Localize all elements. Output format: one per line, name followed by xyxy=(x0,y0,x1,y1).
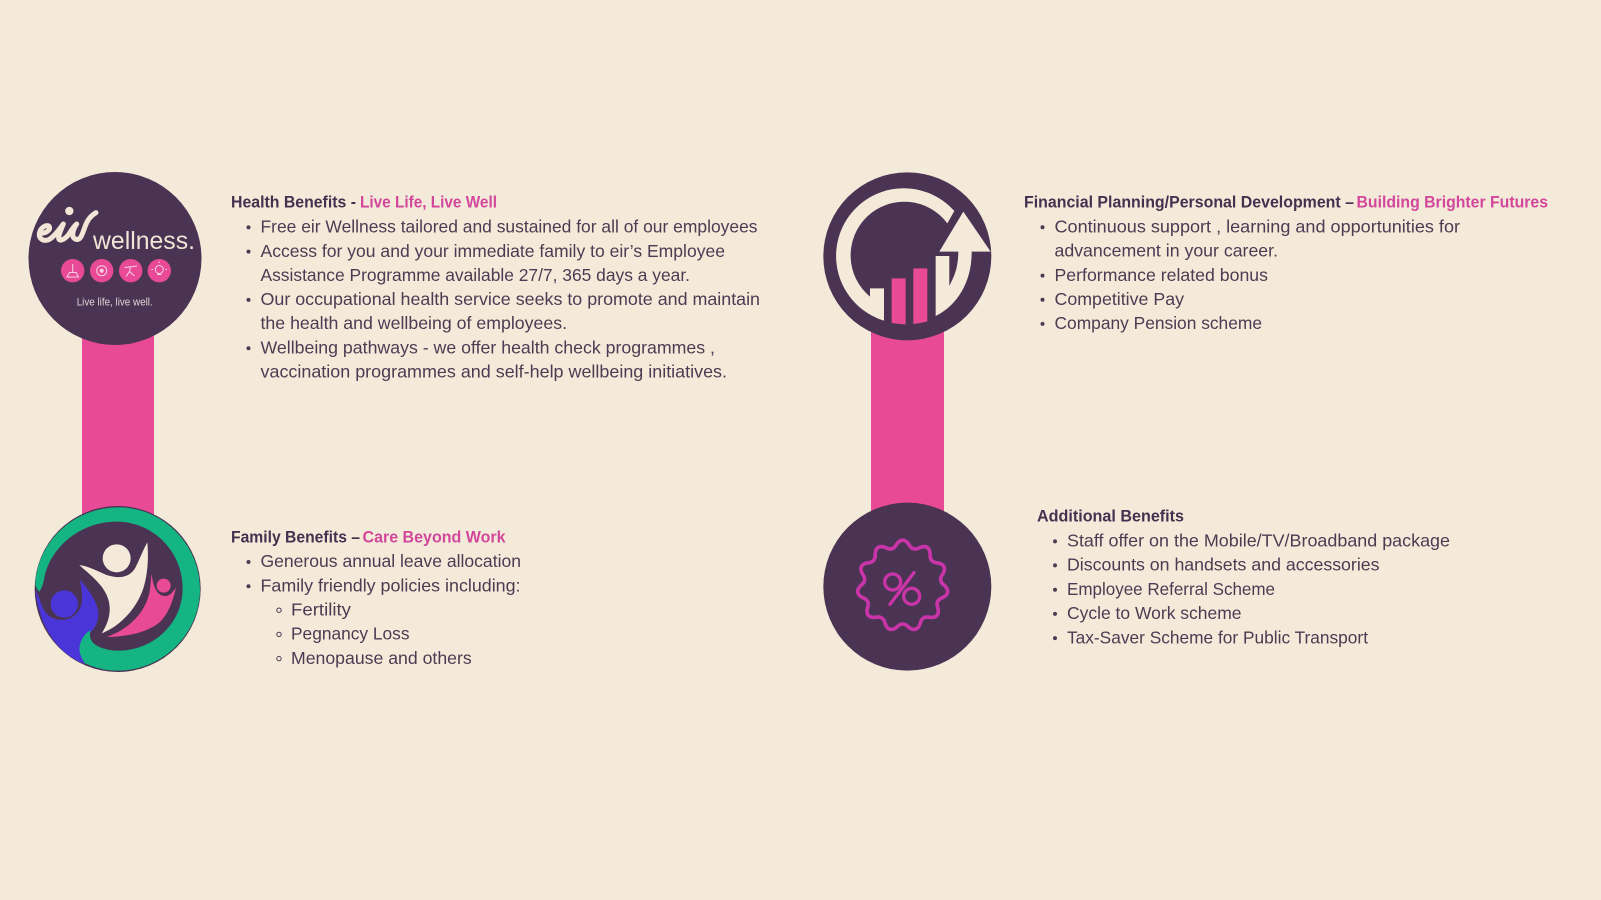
bullet list: health: Our occupational health service seeks to promote and maintain xyxy=(260,289,760,309)
bullet list: additional: Employee Referral Scheme xyxy=(1067,579,1275,599)
icon: eir wellness badge xyxy=(28,172,202,345)
heading accent: live life: Live Life, Live Well xyxy=(360,194,497,212)
scalloped badge xyxy=(858,540,948,629)
pink figure xyxy=(107,573,176,637)
bullet list: health: the health and wellbeing of employees. xyxy=(260,313,567,333)
icon: financial growth badge xyxy=(823,172,991,340)
bullet list: additional: Cycle to Work scheme xyxy=(1067,603,1242,623)
wellness icon: movement xyxy=(119,259,142,282)
bullet list: financial: Competitive Pay xyxy=(1054,289,1184,309)
blue figure head xyxy=(51,590,78,618)
wellness icon: mind xyxy=(90,259,113,282)
bullet list: family xyxy=(246,551,521,668)
pink bars xyxy=(892,268,927,324)
bullet list: health: Wellbeing pathways - we offer health check programmes , xyxy=(260,337,715,357)
connector bar: financial to additional xyxy=(871,330,944,515)
arrow head xyxy=(939,212,991,252)
text block: additional benefits xyxy=(1037,508,1450,647)
pink figure head xyxy=(157,579,171,593)
blue figure xyxy=(35,579,98,664)
bullet list: financial: Continuous support , learning and opportunities for xyxy=(1054,216,1460,236)
icon: family figures badge xyxy=(35,506,201,672)
bullet list: additional: Discounts on handsets and accessories xyxy=(1067,555,1380,575)
cream figure head xyxy=(103,544,131,572)
heading accent: building brighter futures: Building Brighter Futures xyxy=(1356,194,1548,212)
bullet list: financial: Company Pension scheme xyxy=(1054,313,1262,333)
heading accent: care beyond work: Care Beyond Work xyxy=(362,528,506,546)
heading: additional benefits: Additional Benefits xyxy=(1037,508,1184,526)
bullet list: family: Menopause and others xyxy=(291,648,472,668)
bullet list: family: Family friendly policies including: xyxy=(260,575,520,595)
bullet list: family: Pegnancy Loss xyxy=(291,624,410,644)
icon: percent discount badge xyxy=(823,503,991,671)
growth ring xyxy=(836,188,954,321)
percent sign xyxy=(885,573,920,604)
heading: family benefits: Family Benefits – xyxy=(231,528,360,546)
bullet list: financial: advancement in your career. xyxy=(1054,241,1278,261)
bullet list: family: Fertility xyxy=(291,599,351,619)
bullet list: health: Free eir Wellness tailored and sustained for all of our employees xyxy=(260,217,758,237)
bullet list: family: Generous annual leave allocation xyxy=(260,551,521,571)
bullet list: financial xyxy=(1040,216,1460,333)
tagline: Live life, live well. xyxy=(77,296,153,308)
text block: health benefits xyxy=(231,194,760,382)
bullet list: additional: Staff offer on the Mobile/TV/Broadband package xyxy=(1067,531,1450,551)
cream figure xyxy=(79,542,148,633)
green ring xyxy=(35,507,200,671)
wellness icon: meditation xyxy=(61,259,84,282)
bullet list: health: vaccination programmes and self-help wellbeing initiatives. xyxy=(260,362,727,382)
bullet list: financial: Performance related bonus xyxy=(1054,265,1268,285)
bullet list: additional: Tax-Saver Scheme for Public Transport xyxy=(1067,627,1368,647)
bullet list: health: Access for you and your immediate family to eir’s Employee xyxy=(260,241,725,261)
connector bar: health to family xyxy=(82,330,154,525)
wellness icon: idea xyxy=(148,259,171,282)
text block: family benefits xyxy=(231,528,521,668)
text block: financial planning xyxy=(1024,194,1548,333)
eir logo mark xyxy=(39,209,96,240)
heading: financial planning: Financial Planning/Personal Development – xyxy=(1024,194,1354,212)
wordmark: wellness. xyxy=(92,227,195,255)
bullet list: health xyxy=(246,217,760,382)
bullet list: health: Assistance Programme available 27/7, 365 days a year. xyxy=(260,265,690,285)
right bar and ring xyxy=(936,251,972,316)
heading: health benefits: Health Benefits - xyxy=(231,194,356,212)
bullet list: additional xyxy=(1053,531,1450,647)
